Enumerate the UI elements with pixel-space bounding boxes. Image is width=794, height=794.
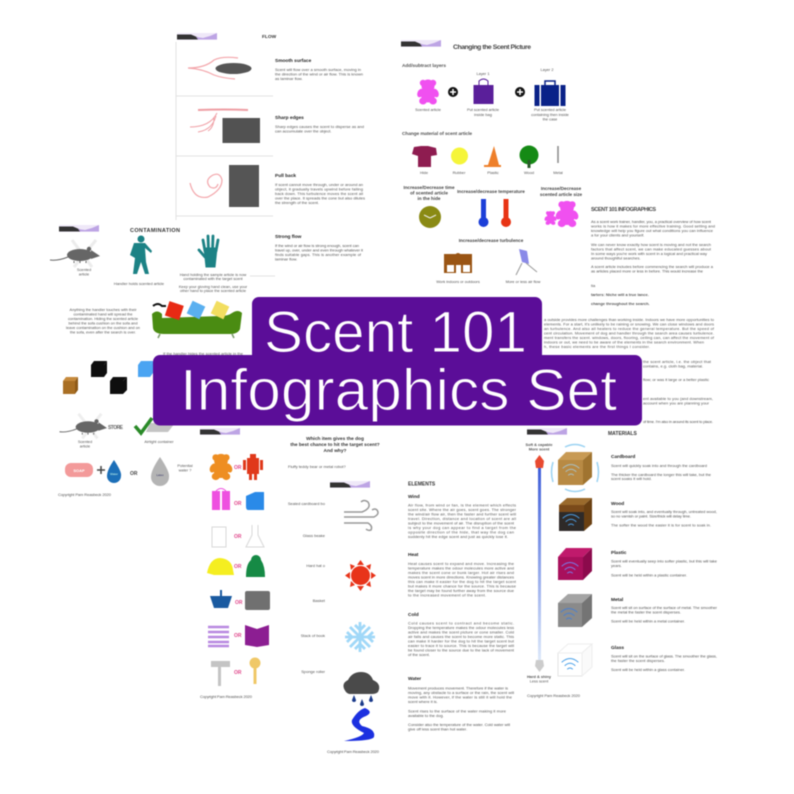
text: cardboard: Cardboard bbox=[611, 454, 635, 460]
banner: scent 101 bbox=[252, 297, 542, 363]
text: smooth surface: the direction of the wind or air flow. This is known bbox=[275, 72, 363, 76]
diagram: sharp edges bbox=[190, 110, 260, 143]
label: scale top: Soft & capable bbox=[525, 442, 553, 447]
text: glass: Glass bbox=[611, 645, 624, 651]
icon: small bear bbox=[544, 211, 557, 225]
text: intro paragraphs: a for your clients and yourself. bbox=[591, 232, 644, 238]
text: increase time bbox=[403, 185, 455, 201]
text: cold: of the scent. bbox=[408, 652, 430, 657]
text: increase size: Increase/Decrease bbox=[541, 186, 582, 191]
text: intro paragraphs bbox=[591, 219, 715, 306]
icon: rain cloud bbox=[343, 672, 379, 706]
text: copyright: Copyright Pam Reasbeck 2020 bbox=[527, 693, 581, 698]
text: smooth surface: Scent will flow over a smooth surface, moving in bbox=[275, 67, 361, 72]
text: scent work paragraph: indoors or out, we need to be aware of the elements in the search environment. When bbox=[544, 340, 704, 344]
text: intro paragraphs: works is how it makes for more effective training. Good setting and bbox=[591, 224, 715, 228]
panel: elements bbox=[327, 481, 517, 754]
label: scented article 2: Scented bbox=[78, 439, 92, 444]
labels: materials: Hide bbox=[420, 170, 428, 175]
icon: rat 2 bbox=[60, 414, 107, 438]
icon: grey drop bbox=[151, 457, 169, 486]
text: strong flow: travel up, over, under and even through whatever it bbox=[275, 248, 364, 252]
title line 2: Infographics Set bbox=[180, 358, 617, 423]
text: pull back bbox=[275, 173, 365, 205]
text: increase time: of scented article bbox=[410, 190, 448, 196]
text: intro paragraphs: knowledge will help you figure out what conditions you can influence bbox=[591, 228, 714, 233]
icon: plus sign bbox=[97, 466, 105, 474]
text: scent work paragraph: an turbulence. And also all heaters to reduce the general temperature. But the speed of bbox=[544, 326, 715, 331]
icons: cubes bbox=[63, 361, 153, 394]
text: heat: temperature makes the odour molecules more active and bbox=[408, 566, 514, 570]
icon row: beakers: OR bbox=[234, 534, 242, 540]
text: cold: can make it harder for the dog to hit the target scent but bbox=[408, 638, 515, 644]
text: scent work paragraph bbox=[544, 317, 715, 349]
text: copyright: Copyright Pam Reasbeck 2020 bbox=[58, 492, 112, 497]
text: increase time: Increase/Decrease time bbox=[403, 185, 455, 190]
text: cold: easier to trace it to source. This is because the target will bbox=[408, 643, 514, 648]
icon: red thermometer bbox=[501, 199, 511, 227]
text: scent work paragraph: elements. For a start, it's unlikely to be raining or snowing. We can close windows and doors bbox=[544, 322, 714, 326]
labels: quiz items: Fluffy teddy bear or metal robot? bbox=[288, 464, 347, 469]
icon: plus 2 bbox=[515, 87, 525, 97]
text: hand: Keep your gloving hand clean, use your bbox=[179, 284, 248, 289]
panel: changing the scent picture bbox=[401, 40, 583, 284]
text: sharp edges: can accumulate over the object. bbox=[275, 128, 331, 134]
icon: grey drop: Latex bbox=[156, 473, 164, 477]
text: intro paragraphs: as articles placed more or less in before. This would increase the bbox=[591, 268, 704, 274]
panel: which item quiz bbox=[200, 428, 380, 699]
text: note bbox=[177, 463, 193, 472]
labels: turbulence: Work indoors or outdoors bbox=[436, 279, 480, 284]
text: glass: Scent will sit on the surface of glass. The smoother the glass, bbox=[611, 654, 717, 658]
labels: materials: Rubber bbox=[453, 170, 466, 175]
panel: scent 101 infographics intro bbox=[544, 207, 715, 424]
text: cardboard bbox=[611, 454, 712, 481]
text: metal: Scent will sit on surface of the surface of metal. The smoother bbox=[611, 605, 718, 610]
text: wind: Wind bbox=[408, 494, 420, 500]
heading: add layers: Add/subtract layers bbox=[402, 63, 446, 69]
icon: water drop: Water bbox=[110, 472, 118, 476]
text: wind: suddenly hit the edge scent and just as quickly lose it. bbox=[408, 534, 508, 539]
text: intro paragraphs: change throughout the search. bbox=[591, 301, 650, 306]
icon row: roller or key bbox=[211, 658, 260, 686]
labels: quiz items: Hard hat o bbox=[306, 563, 326, 568]
labels: layers: Put scented article bbox=[534, 107, 566, 112]
text: wind: the wind/air flow air, then the faster and further scent will bbox=[408, 512, 516, 516]
icon: wind bbox=[344, 500, 378, 530]
label: handler: Handler holds scented article bbox=[114, 281, 164, 286]
heading: elements: ELEMENTS bbox=[408, 482, 436, 488]
text: glass bbox=[611, 645, 717, 672]
text: right notes: the scent article, i.e. the object that bbox=[643, 359, 712, 364]
icon: rat with rays bbox=[50, 240, 100, 267]
icon: person bbox=[130, 236, 152, 274]
text: intro paragraphs: As a scent work trainer, handler, you, a practical overview of how scent bbox=[591, 219, 712, 224]
text: turbulence: Increase/decrease turbulence bbox=[459, 238, 524, 243]
label: scented article: article bbox=[79, 272, 89, 276]
text: pull back: over the place. It spreads the cone but also dilutes bbox=[275, 196, 365, 200]
text: smooth surface: as laminar flow. bbox=[275, 76, 303, 81]
labels: layers bbox=[415, 67, 569, 122]
text: plastic: Scent will be held within a plastic container. bbox=[611, 572, 687, 578]
text: copyright: Copyright Pam Reasbeck 2020 bbox=[327, 749, 380, 754]
text: cold: Dropping the temperature makes the odour molecules less bbox=[408, 625, 514, 630]
text: water: Movement produces movement. Therefore if the water is bbox=[408, 686, 508, 690]
label: scale bottom bbox=[527, 674, 552, 684]
logo: materials bbox=[527, 428, 567, 435]
icon row: gift or box bbox=[212, 488, 264, 510]
text: note: Potential bbox=[177, 463, 193, 468]
labels: layers: Layer 2 bbox=[541, 67, 553, 72]
text: cold: Cold bbox=[408, 612, 419, 618]
text: sharp edges: Sharp edges bbox=[275, 115, 304, 121]
text: heat: but makes it more chance for the source. This is because bbox=[408, 584, 517, 588]
text: pull back: the strength of the scent. bbox=[275, 200, 319, 205]
heading: changing the scent picture: Changing the Scent Picture bbox=[453, 44, 531, 51]
logo: flow bbox=[177, 33, 217, 40]
text: or: OR bbox=[130, 471, 138, 477]
text: strong flow: finds suitable gaps. This is another example of bbox=[275, 252, 362, 257]
icon: teal hand bbox=[199, 236, 218, 267]
text: water: available to the dog. bbox=[408, 713, 444, 718]
text: wind: Air flow, from wind or fan, is the element which effects bbox=[408, 502, 516, 508]
text: cold: be found closer to the source due to the lack of movement bbox=[408, 648, 515, 652]
icon: water drop bbox=[107, 460, 121, 483]
labels: materials bbox=[420, 170, 563, 175]
labels: layers: inside bag bbox=[474, 112, 492, 117]
text: sharp edges: Sharp edges causes the scent to disperse as and bbox=[275, 124, 364, 129]
panel: materials bbox=[525, 428, 718, 698]
text: water bbox=[408, 676, 514, 732]
icon: large bear bbox=[554, 201, 580, 227]
text: store: STORE bbox=[108, 425, 124, 431]
text: intro paragraphs: tarters: Niche will a true lance. bbox=[591, 292, 649, 297]
text: contamination paragraph: Anything the handler touches with their bbox=[69, 307, 137, 312]
text: scent work paragraph: h, these basic elements are the first things I consider. bbox=[544, 344, 650, 349]
label: scale bottom: Hard & shiny bbox=[527, 674, 552, 679]
text: increase size: scented article size bbox=[540, 192, 583, 197]
text: contamination paragraph: leave contamination on the cushion and on bbox=[66, 325, 140, 330]
logo: elements bbox=[330, 481, 370, 488]
label: scented article bbox=[77, 267, 91, 276]
heading: intro: SCENT 101 INFOGRAPHICS bbox=[591, 207, 656, 213]
text: heat: this can make it easier for the dog to hit the target scent bbox=[408, 579, 517, 584]
text: right notes: account when you are planning your bbox=[643, 400, 710, 406]
text: pull back: back down. This turbulence moves the scent all bbox=[275, 191, 363, 196]
text: glass: Scent will be held within a glass container. bbox=[611, 667, 685, 672]
heading: quiz: the best chance to hit the target scent? bbox=[290, 442, 380, 448]
heading: quiz: And why? bbox=[324, 448, 347, 454]
labels: quiz items: Sponge roller bbox=[301, 669, 326, 674]
text: intro paragraphs: In some ways you're work with scent in a logical and practical way bbox=[591, 251, 707, 256]
icon: plastic cube bbox=[558, 548, 592, 580]
icon: tree bbox=[520, 146, 538, 168]
text: water: Scent rises to the surface of the water making it more bbox=[408, 708, 507, 714]
icon: sun bbox=[345, 560, 376, 591]
icon: metal rod bbox=[557, 146, 559, 163]
icon row: basket or case bbox=[210, 590, 270, 610]
text: copyright: Copyright Pam Reasbeck 2020 bbox=[200, 694, 253, 699]
text: metal: the metal the faster the scent disperses. bbox=[611, 610, 681, 614]
text: cold: air falls and causes the scent to become more static. This bbox=[408, 634, 514, 639]
text: intro paragraphs: We can never know exactly how scent is moving and not the search bbox=[591, 242, 711, 247]
text: cold: Cold causes scent to contract and become static. bbox=[408, 620, 514, 626]
heading: contamination: CONTAMINATION bbox=[130, 228, 180, 234]
label: scented article 2 bbox=[78, 439, 92, 448]
text: contamination paragraph bbox=[66, 307, 140, 334]
labels: layers: containing then inside bbox=[531, 112, 569, 117]
text: metal bbox=[611, 597, 718, 624]
text: plastic: Scent will eventually seep into softer plastic, but this will take bbox=[611, 558, 718, 564]
text: wind: scent site. Where the air goes, scent goes. The stronger bbox=[408, 507, 517, 512]
text: pull back: object, it gradually travels upwind before falling bbox=[275, 186, 363, 192]
text: heat: Heat causes scent to expand and move. Increasing the bbox=[408, 561, 515, 566]
icon row: basket or case: OR bbox=[235, 600, 243, 606]
text: heat: to the increased movement of the scent. bbox=[408, 592, 486, 598]
icon: house bbox=[444, 253, 472, 273]
text: scent work paragraph: a outside provides more challenges than working inside. Indoors we have more opportunities to bbox=[544, 317, 715, 322]
text: water: move with it. However, if the water is still it will hold the bbox=[408, 694, 513, 700]
labels: layers: Layer 1 bbox=[477, 71, 489, 76]
icon row: gift or box: OR bbox=[234, 501, 242, 507]
text: metal: Scent will be held within a metal container. bbox=[611, 618, 685, 624]
text: cardboard: The thicker the cardboard the longer this will take, but the bbox=[611, 472, 712, 477]
panel: contamination bbox=[50, 225, 248, 497]
text: cold: active and makes the scent picture or cone smaller. Cold bbox=[408, 630, 514, 634]
text: water: moving, any obstacle to a surface or the rain, the scent will bbox=[408, 690, 514, 695]
text: right notes: contains, e.g. cloth bag, material. bbox=[643, 364, 703, 368]
text: heat: the target may be found further away from the source due bbox=[408, 588, 515, 593]
text: water: give off less scent than hot water. bbox=[408, 726, 467, 732]
text: wind: subject to the movement of air. The disruption of the scent bbox=[408, 520, 515, 526]
text: wood: so no varnish or paint. Size/thick will delay time. bbox=[611, 514, 691, 518]
logo: quiz bbox=[200, 428, 240, 435]
text: pull back: If scent cannot move through, under or around an bbox=[275, 182, 363, 187]
text: hand bbox=[179, 272, 248, 293]
text: wood: The softer the wood the easier it is for scent to soak in. bbox=[611, 522, 711, 528]
diagram: pull back bbox=[190, 165, 259, 207]
icon: kite bbox=[516, 249, 537, 275]
text: hand: Hand holding the sample article is now bbox=[180, 272, 246, 277]
text: strong flow: If the wind or air flow is strong enough, scent can bbox=[275, 243, 359, 248]
text: water: Consider also the temperature of the water. Cold water will bbox=[408, 722, 510, 727]
icon: green sofa bbox=[152, 301, 242, 338]
label: scale bottom: Less scent bbox=[530, 678, 549, 684]
logo: contamination bbox=[59, 225, 99, 232]
logo: scent picture bbox=[401, 40, 441, 47]
panel: air flow bbox=[176, 33, 365, 276]
heading: materials: MATERIALS bbox=[608, 431, 637, 437]
icon row: roller or key: OR bbox=[234, 670, 242, 676]
label: scented article 2: article bbox=[80, 444, 90, 448]
banner: infographics set bbox=[153, 355, 642, 426]
labels: layers: the case bbox=[543, 116, 557, 122]
text: wood: Wood bbox=[611, 501, 624, 507]
heading: quiz: Which item gives the dog bbox=[306, 436, 364, 442]
label: scale top bbox=[525, 442, 553, 452]
text: sharp edges bbox=[275, 115, 364, 134]
text: heat bbox=[408, 552, 517, 598]
text: intro paragraphs: around thoughtful searches. bbox=[591, 256, 641, 260]
text: glass: the faster the scent disperses. bbox=[611, 658, 665, 663]
icon: cardboard cube bbox=[552, 444, 598, 492]
icon: plus 1 bbox=[448, 87, 458, 97]
text: cold bbox=[408, 612, 515, 657]
labels: quiz items: Sealed cardboard bo bbox=[288, 501, 326, 506]
diagram: smooth surface bbox=[188, 57, 252, 79]
title banner bbox=[153, 297, 642, 426]
text: plastic: Plastic bbox=[611, 550, 627, 556]
icon: pink bear bbox=[416, 80, 440, 104]
text: wind: is why your dog can appear to find a target from the bbox=[408, 525, 517, 530]
labels: materials: Wood bbox=[524, 170, 534, 175]
text: scent work paragraph: ment transfers the scent. windows, doors, flooring, ceiling can, can affect the movement of bbox=[544, 335, 715, 340]
text: right notes: ent available to you (and downstream, bbox=[643, 396, 713, 401]
text: contamination paragraph: behind the sofa cushion on the sofa and bbox=[68, 320, 138, 326]
text: strong flow bbox=[275, 234, 364, 262]
icon: cone bbox=[484, 146, 501, 167]
text: hand: other hand to place the scented article bbox=[180, 288, 246, 293]
text: right notes: of time. I'm also in around its scent to place. bbox=[643, 419, 713, 424]
labels: materials: Plastic bbox=[487, 170, 499, 175]
text: smooth surface: Smooth surface bbox=[275, 58, 312, 64]
icon: container and check bbox=[135, 418, 175, 433]
icon row: hat or beanie bbox=[207, 555, 265, 577]
labels: turbulence bbox=[436, 279, 541, 284]
icon: wood cube bbox=[559, 498, 592, 531]
text: water: scent where it is. bbox=[408, 699, 438, 704]
text: strong flow: laminar flow. bbox=[275, 256, 297, 262]
text: right notes bbox=[643, 359, 713, 424]
text: increase temperature: Increase/decrease temperature bbox=[457, 189, 525, 194]
icon: soap: SOAP bbox=[73, 468, 85, 473]
text: intro paragraphs: A scent article includes before commencing the search will produce a bbox=[591, 264, 714, 269]
text: increase size bbox=[540, 186, 583, 197]
heading: change material: Change material of scent article bbox=[402, 131, 472, 137]
label: scale top: More scent bbox=[529, 446, 550, 452]
labels: quiz items: Stack of book bbox=[301, 633, 325, 638]
text: strong flow: Strong flow bbox=[275, 234, 302, 240]
text: cardboard: scent soaks it will hold. bbox=[611, 476, 652, 481]
text: heat: makes the scent cone or bunk larger. Hot air rises and bbox=[408, 570, 514, 575]
icon row: books bbox=[208, 625, 269, 647]
labels: quiz items: Basket bbox=[313, 598, 326, 603]
text: plastic: years. bbox=[611, 563, 622, 568]
text: pull back: Pull back bbox=[275, 173, 296, 179]
text: hand: contaminated with the target scent bbox=[183, 276, 244, 281]
text: cardboard: Scent will quickly soak into and through the cardboard bbox=[611, 463, 707, 468]
text: intro paragraphs: tia bbox=[591, 283, 596, 288]
text: intro paragraphs: factors that affect scent, we can make educated guesses about bbox=[591, 246, 712, 252]
text: increase time: in the hide bbox=[418, 196, 441, 201]
text: contamination paragraph: contaminated hand will spread the bbox=[73, 312, 133, 316]
arrow: scent scale bbox=[535, 455, 544, 672]
icon row: hat or beanie: OR bbox=[234, 564, 242, 570]
icon: soap bbox=[65, 463, 93, 477]
icon: metal cube bbox=[558, 594, 592, 627]
text: contamination paragraph: the sofa, even after the search is over. bbox=[70, 330, 136, 334]
labels: materials: Metal bbox=[553, 170, 563, 175]
labels: layers: Scented article bbox=[415, 107, 441, 112]
text: sofa caption: If the handler hides the scented article in the bbox=[163, 351, 244, 356]
icon row: bear or robot: OR bbox=[234, 465, 242, 471]
icon: river bbox=[344, 708, 374, 741]
icon: blue thermometer bbox=[478, 199, 488, 227]
title line 1: Scent 101 bbox=[264, 300, 527, 365]
text: metal: Metal bbox=[611, 597, 623, 603]
text: wind: travel. Direction, distance and location of scent are all bbox=[408, 516, 516, 521]
text: smooth surface bbox=[275, 58, 363, 81]
icon: snowflake bbox=[345, 622, 375, 652]
icon: purple bag bbox=[474, 79, 494, 104]
text: water: Water bbox=[408, 676, 421, 682]
text: heat: moves scent in more directions. Knowing greater distances bbox=[408, 574, 514, 580]
text: wood bbox=[611, 501, 717, 528]
label: airtight: Airtight container bbox=[144, 439, 174, 444]
labels: layers: Put scented article bbox=[467, 107, 499, 112]
labels: quiz items bbox=[288, 464, 347, 674]
text: note: water ? bbox=[179, 468, 192, 472]
text: wood: Scent will soak into, and eventually through, untreated wood, bbox=[611, 509, 717, 514]
text: contamination paragraph: contamination. Hiding the scented article bbox=[68, 316, 138, 321]
text: heat: Heat bbox=[408, 552, 419, 558]
label: scented article: Scented bbox=[77, 267, 91, 272]
labels: quiz items: Glass beake bbox=[303, 533, 326, 538]
text: scent work paragraph: cent circulation. Movement of dog and handler through the search area causes turbulence. bbox=[544, 330, 714, 336]
icon row: bear or robot bbox=[208, 454, 263, 480]
labels: turbulence: More or less air flow bbox=[506, 279, 541, 284]
icon row: books: OR bbox=[234, 633, 242, 639]
icon: t-shirt bbox=[412, 146, 437, 167]
icon: navy suitcase bbox=[534, 81, 566, 106]
icon row: beakers bbox=[212, 525, 264, 547]
text: wind: opposite direction of the hide, that way the dog can bbox=[408, 530, 514, 534]
icon: ball bbox=[451, 148, 468, 164]
text: wind bbox=[408, 494, 517, 539]
text: plastic bbox=[611, 550, 718, 578]
heading: quiz bbox=[290, 436, 380, 454]
text: right notes: flow; or was it large or a better plastic bbox=[643, 377, 709, 382]
icon: glass cube bbox=[558, 644, 592, 676]
heading: flow: FLOW bbox=[262, 34, 277, 40]
icon: clock bbox=[419, 206, 441, 228]
